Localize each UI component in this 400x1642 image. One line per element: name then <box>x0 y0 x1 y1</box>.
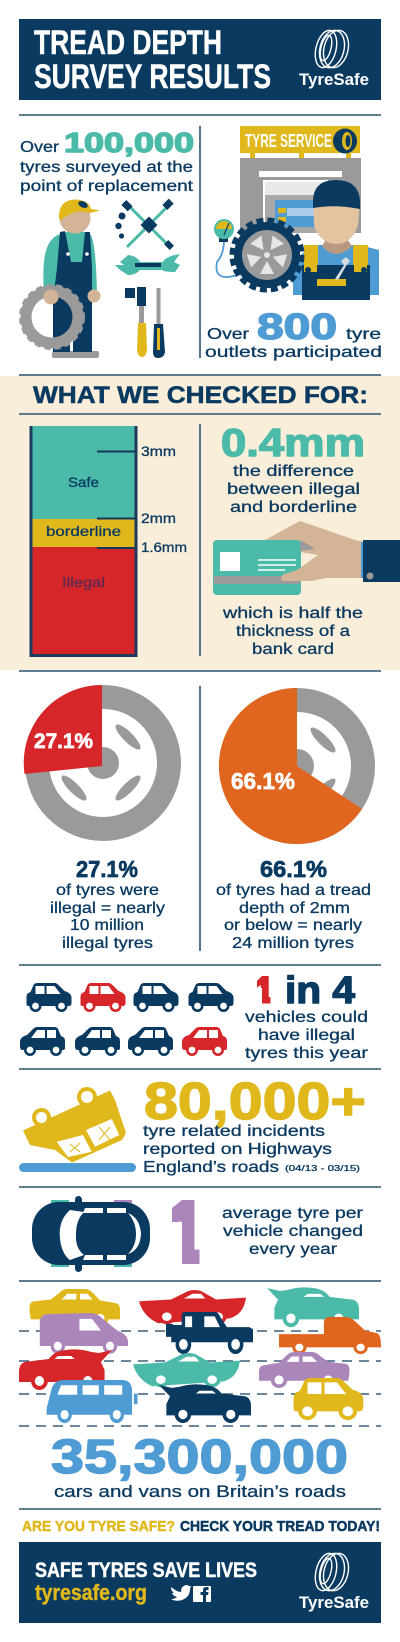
text: 66.1% of tyres below 2mm <box>216 856 371 952</box>
icon: hand holding bank card <box>213 521 400 595</box>
title <box>34 24 271 96</box>
text: 66.1% of tyres below 2mm: or below = nearly <box>224 917 362 934</box>
text: over 800 tyre outlets <box>205 306 382 361</box>
title: TREAD DEPTH <box>34 24 222 62</box>
title: SURVEY RESULTS <box>34 58 271 96</box>
text: 66.1% of tyres below 2mm: of tyres had a tread <box>216 882 371 899</box>
text: 80,000+ incidents: tyre related incidents <box>143 1123 325 1140</box>
panel: what we checked for <box>0 375 400 671</box>
chart: 66.1% tyre pie: 66.1% <box>231 768 295 794</box>
sign <box>240 126 360 158</box>
text: 80,000+ incidents: England’s roads <box>143 1159 279 1176</box>
text: 1 in 4 vehicles: tyres this year <box>245 1045 369 1062</box>
text: 0.4mm difference: 0.4mm <box>221 422 365 465</box>
text: 27.1% of tyres illegal: 10 million <box>70 917 144 934</box>
mechanic <box>293 180 379 300</box>
text: 27.1% of tyres illegal: illegal tyres <box>62 935 153 952</box>
icon: rows of eight cars <box>20 983 234 1056</box>
TyreSafe logo <box>299 1551 369 1612</box>
text: average tyre per vehicle: every year <box>249 1241 338 1258</box>
text: 0.4mm difference: the difference <box>233 463 354 480</box>
text: 0.4mm difference: and borderline <box>230 499 357 516</box>
text: 66.1% of tyres below 2mm: depth of 2mm <box>239 900 350 917</box>
chart: tread depth gauge: 3mm <box>141 443 176 459</box>
text: 1 in 4 vehicles: vehicles could <box>245 1009 368 1026</box>
chart: tread depth gauge: 2mm <box>141 510 176 526</box>
call to action: CHECK YOUR TREAD TODAY! <box>180 1518 380 1535</box>
slogan: SAFE TYRES SAVE LIVES <box>35 1559 257 1582</box>
text: half the thickness of a bank card: which is half the <box>222 605 363 622</box>
website: tyresafe.org <box>35 1580 147 1605</box>
call to action <box>22 1518 380 1535</box>
text: 80,000+ incidents: 80,000+ <box>144 1073 366 1131</box>
icon: twitter <box>171 1585 191 1601</box>
big number 1: 1 <box>170 1182 202 1284</box>
text: half the thickness of a bank card: bank card <box>252 641 334 658</box>
TyreSafe logo <box>299 28 369 89</box>
text: over 800 tyre outlets: 800 <box>257 306 337 347</box>
TyreSafe logo: TyreSafe <box>299 70 369 89</box>
text: 66.1% of tyres below 2mm: 66.1% <box>260 856 327 882</box>
text: average tyre per vehicle: average tyre per <box>222 1205 364 1222</box>
text: over 100,000 tyres surveyed: Over <box>20 139 59 156</box>
text: average tyre per vehicle <box>222 1205 364 1258</box>
text: 1 in 4 vehicles: in 4 <box>285 970 355 1012</box>
chart: tread depth gauge <box>31 426 187 656</box>
text: 27.1% of tyres illegal <box>50 856 165 952</box>
chart: traffic of cars <box>19 1287 381 1426</box>
footer banner <box>19 1542 381 1623</box>
icon: spanner <box>115 254 180 275</box>
text: 35,300,000 cars and vans <box>51 1431 348 1501</box>
icon: car top view <box>32 1196 150 1272</box>
text: 1 in 4 vehicles <box>245 970 369 1062</box>
text: over 800 tyre outlets: tyre <box>346 326 381 343</box>
text: 0.4mm difference: between illegal <box>227 481 360 498</box>
text: 66.1% of tyres below 2mm: 24 million tyres <box>232 935 354 952</box>
call to action: ARE YOU TYRE SAFE? <box>22 1518 175 1535</box>
text: 0.4mm difference <box>221 422 365 516</box>
sign: TYRE SERVICE <box>245 131 332 151</box>
text: 80,000+ incidents: (04/13 - 03/15) <box>285 1163 360 1173</box>
text: 35,300,000 cars and vans: cars and vans on Britain’s roads <box>54 1482 346 1501</box>
icon: tools <box>115 199 180 358</box>
heading: WHAT WE CHECKED FOR: <box>33 382 368 409</box>
icon: facebook <box>193 1586 211 1602</box>
chart: tread depth gauge: Safe <box>68 474 99 490</box>
chart: 27.1% tyre pie: 27.1% <box>34 730 93 753</box>
text: average tyre per vehicle: vehicle changed <box>223 1223 363 1240</box>
icon: ratchet and screwdriver <box>125 287 165 358</box>
chart: tread depth gauge: Illegal <box>62 574 105 590</box>
icon: tyre service garage <box>214 126 379 300</box>
text: 27.1% of tyres illegal: illegal = nearly <box>50 900 165 917</box>
chart: tread depth gauge: borderline <box>46 523 121 539</box>
text: 27.1% of tyres illegal: 27.1% <box>76 856 138 882</box>
text: over 100,000 tyres surveyed <box>20 127 194 195</box>
text: over 100,000 tyres surveyed: tyres surveyed at the <box>20 159 193 176</box>
icon: cross wrench <box>115 199 174 250</box>
header banner <box>19 19 381 100</box>
text: half the thickness of a bank card <box>222 605 363 658</box>
gauge and hose <box>214 219 252 277</box>
text: over 800 tyre outlets: outlets participated <box>205 344 382 361</box>
chart: tread depth gauge: 1.6mm <box>141 539 187 555</box>
text: over 800 tyre outlets: Over <box>207 326 250 343</box>
text: 80,000+ incidents <box>143 1073 366 1176</box>
text: over 100,000 tyres surveyed: point of replacement <box>20 178 194 195</box>
text: 80,000+ incidents: reported on Highways <box>143 1141 332 1158</box>
chart: 27.1% tyre pie <box>24 685 169 829</box>
text: 35,300,000 cars and vans: 35,300,000 <box>51 1431 348 1484</box>
text: 27.1% of tyres illegal: of tyres were <box>56 882 159 899</box>
wheel <box>232 220 302 290</box>
text: over 100,000 tyres surveyed: 100,000 <box>64 127 194 158</box>
icon: mechanic with tyre <box>21 200 100 358</box>
text: 1 in 4 vehicles: 1 <box>255 970 273 1012</box>
text: half the thickness of a bank card: thickness of a <box>236 623 350 640</box>
text: 1 in 4 vehicles: have illegal <box>258 1027 355 1044</box>
icon: overturned car <box>19 1087 136 1172</box>
chart: 66.1% tyre pie <box>219 688 363 844</box>
TyreSafe logo: TyreSafe <box>299 1593 369 1612</box>
